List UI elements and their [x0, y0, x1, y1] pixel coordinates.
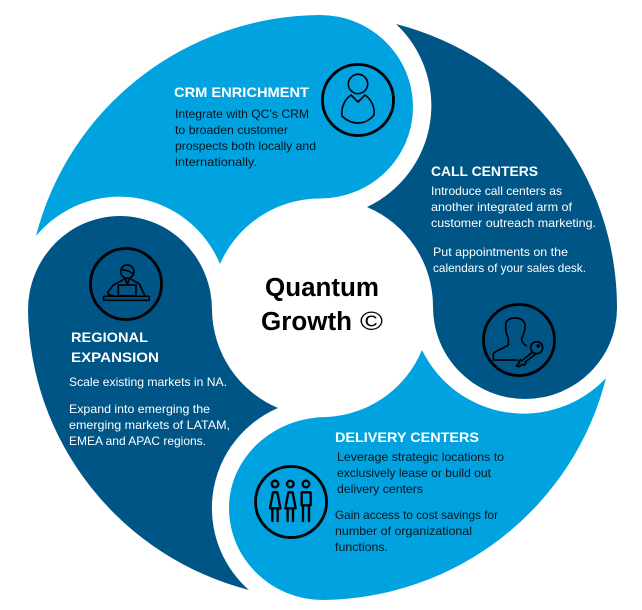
call centers description [431, 184, 596, 275]
delivery centers description [335, 450, 504, 554]
regional expansion description: Scale existing markets in NA. [69, 375, 227, 389]
call centers description: Introduce call centers as [431, 184, 562, 198]
title [261, 274, 383, 336]
panel: delivery centers [229, 350, 606, 600]
regional expansion description: Expand into emerging the [69, 402, 210, 416]
regional expansion heading: REGIONAL [71, 329, 148, 345]
regional expansion heading: EXPANSION [71, 349, 159, 365]
regional expansion description [69, 375, 230, 448]
delivery centers swirl shape [229, 350, 606, 600]
delivery centers description: exclusively lease or build out [337, 466, 492, 480]
icon: three people [256, 466, 326, 538]
call centers heading: CALL CENTERS [431, 163, 538, 179]
CRM description [175, 107, 316, 169]
panel: call centers [367, 24, 617, 399]
regional expansion description: emerging markets of LATAM, [69, 418, 230, 432]
call centers description: customer outreach marketing. [431, 216, 596, 230]
CRM description: internationally. [175, 155, 257, 169]
call centers swirl shape [367, 24, 617, 399]
title: Quantum [265, 274, 379, 302]
icon: person [322, 64, 394, 136]
icon: person at laptop [90, 248, 162, 320]
call centers description: another integrated arm of [431, 200, 573, 214]
delivery centers description: Gain access to cost savings for [335, 508, 498, 522]
panel: CRM enrichment [36, 15, 413, 264]
delivery centers description: delivery centers [337, 482, 423, 496]
title: © [360, 308, 383, 336]
panel: regional expansion [28, 216, 278, 590]
regional expansion heading [71, 329, 159, 365]
icon: person with key [484, 304, 554, 376]
delivery centers description: number of organizational [335, 524, 472, 538]
CRM description: prospects both locally and [175, 139, 316, 153]
regional expansion swirl shape [28, 216, 278, 590]
delivery centers description: functions. [335, 540, 388, 554]
CRM description: Integrate with QC’s CRM [175, 107, 309, 121]
call centers description: Put appointments on the [433, 245, 568, 259]
CRM heading: CRM ENRICHMENT [174, 84, 309, 100]
call centers description: calendars of your sales desk. [433, 261, 586, 275]
delivery centers heading: DELIVERY CENTERS [335, 429, 479, 445]
regional expansion description: EMEA and APAC regions. [69, 434, 206, 448]
title: Growth [261, 308, 352, 336]
CRM description: to broaden customer [175, 123, 288, 137]
CRM swirl shape [36, 15, 413, 264]
delivery centers description: Leverage strategic locations to [337, 450, 504, 464]
